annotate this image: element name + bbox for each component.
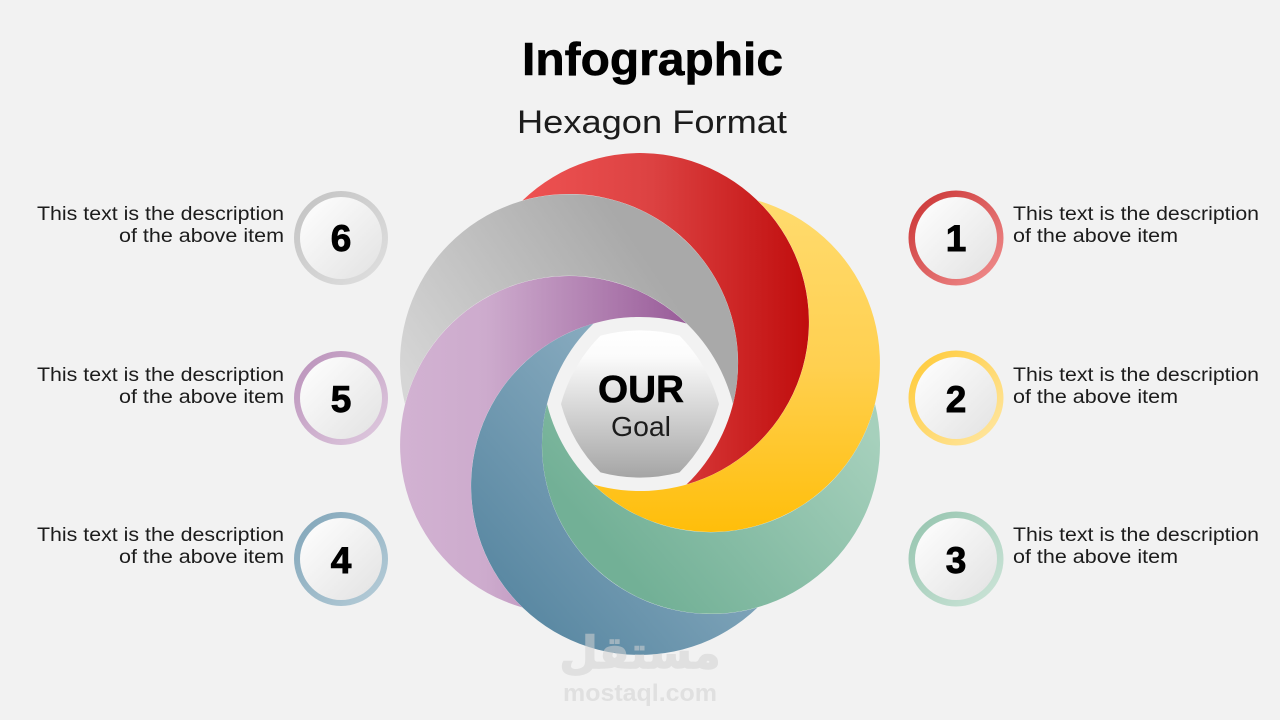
description 5: This text is the description (37, 365, 284, 386)
description 3 (1013, 525, 1259, 568)
center hexagon (561, 330, 719, 478)
description 1: of the above item (1013, 226, 1178, 247)
segment: purple (400, 276, 686, 608)
badge 5 (294, 351, 388, 445)
badge 2: 2 (946, 379, 966, 420)
description 1 (1013, 204, 1259, 247)
badge 1: 1 (946, 218, 966, 259)
watermark (560, 628, 720, 707)
segment: red (522, 153, 809, 485)
description 2 (1013, 365, 1259, 408)
subtitle: Hexagon Format (517, 104, 787, 140)
item 1 (908, 190, 1259, 286)
badge 5: 5 (331, 379, 351, 420)
description 4: of the above item (119, 547, 284, 568)
center heading: OUR (598, 369, 684, 411)
item 6 (37, 191, 388, 285)
watermark arabic: مستقل (560, 628, 720, 679)
description 5: of the above item (119, 387, 284, 408)
item 4 (37, 512, 388, 606)
badge 6: 6 (331, 218, 351, 259)
watermark latin: mostaql.com (563, 680, 717, 707)
spiral diagram (400, 153, 880, 655)
description 4 (37, 525, 284, 568)
segment: blue (471, 324, 758, 655)
segment: yellow (594, 200, 880, 532)
badge 4 (294, 512, 388, 606)
description 3: of the above item (1013, 547, 1178, 568)
description 6 (37, 204, 284, 247)
item 5 (37, 351, 388, 445)
badge 3: 3 (946, 540, 966, 581)
description 4: This text is the description (37, 525, 284, 546)
hexagon shape (561, 330, 719, 478)
description 5 (37, 365, 284, 408)
description 6: of the above item (119, 226, 284, 247)
segment: green (542, 404, 880, 614)
badge 4: 4 (331, 540, 352, 581)
title: Infographic (522, 33, 783, 85)
description 1: This text is the description (1013, 204, 1259, 225)
description 2: of the above item (1013, 387, 1178, 408)
description 3: This text is the description (1013, 525, 1259, 546)
badge 3 (908, 512, 1004, 606)
description 2: This text is the description (1013, 365, 1259, 386)
item 2 (908, 350, 1259, 446)
badge 2 (908, 350, 1004, 446)
description 6: This text is the description (37, 204, 284, 225)
badge 6 (294, 191, 388, 285)
segment: gray (400, 194, 738, 404)
item 3 (908, 512, 1259, 606)
badge 1 (908, 190, 1004, 286)
center label: Goal (611, 411, 671, 442)
